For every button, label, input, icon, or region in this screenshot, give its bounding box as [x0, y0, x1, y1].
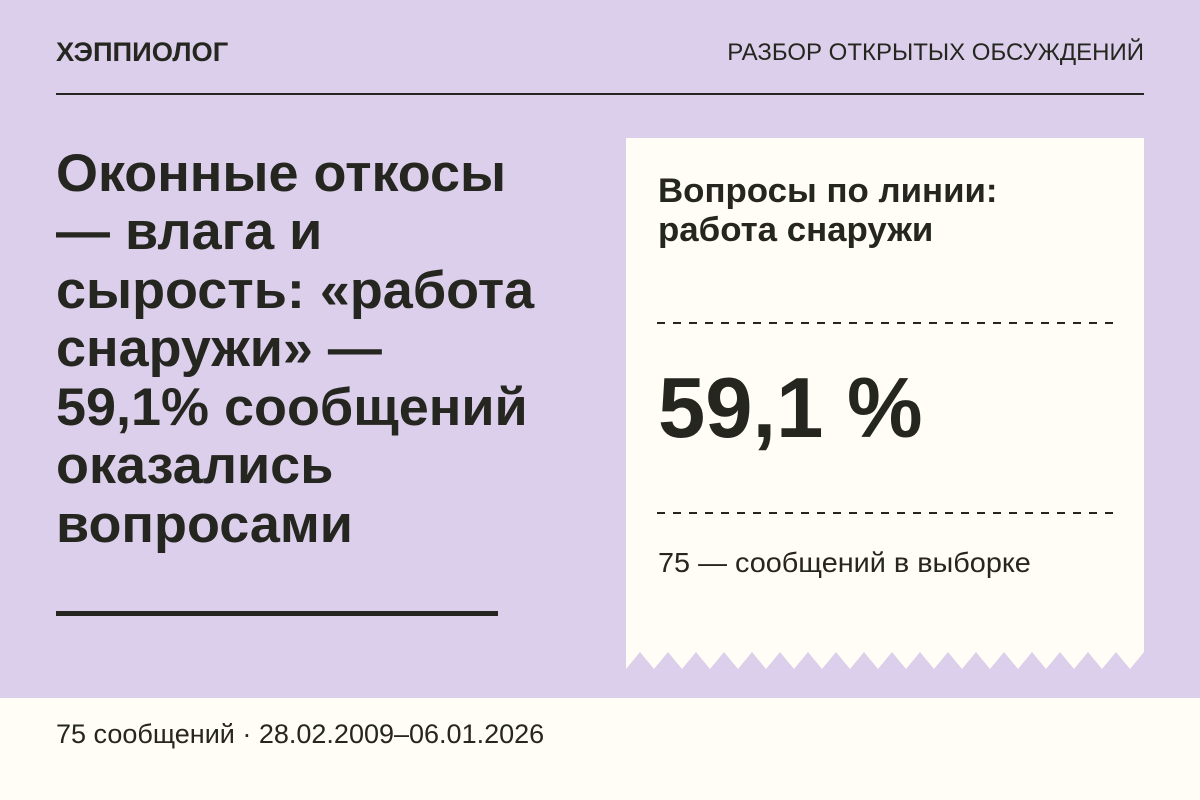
- main heading: Оконные откосы: [56, 144, 506, 203]
- card heading: работа снаружи: [658, 211, 933, 249]
- main heading: 59,1% сообщений: [56, 378, 528, 437]
- card heading: Вопросы по линии:: [658, 172, 998, 210]
- brand name: ХЭППИОЛОГ: [56, 37, 228, 67]
- sample size caption: 75 — сообщений в выборке: [658, 547, 1031, 578]
- panel: receipt card: [626, 138, 1144, 669]
- dashed divider bottom: [657, 512, 1113, 514]
- heading rule: [56, 611, 498, 616]
- header label: РАЗБОР ОТКРЫТЫХ ОБСУЖДЕНИЙ: [727, 39, 1144, 66]
- footer text: 75 сообщений · 28.02.2009–06.01.2026: [56, 719, 544, 749]
- main heading: вопросами: [56, 495, 353, 554]
- footer band: [0, 698, 1200, 800]
- main heading: сырость: «работа: [56, 261, 534, 320]
- card heading: [658, 172, 998, 249]
- main heading: — влага и: [56, 202, 322, 261]
- dashed divider top: [657, 322, 1113, 324]
- main heading: оказались: [56, 436, 333, 495]
- main heading: [56, 144, 534, 554]
- card shape: [626, 138, 1144, 669]
- main heading: снаружи» —: [56, 319, 382, 378]
- big percentage: 59,1 %: [658, 361, 923, 456]
